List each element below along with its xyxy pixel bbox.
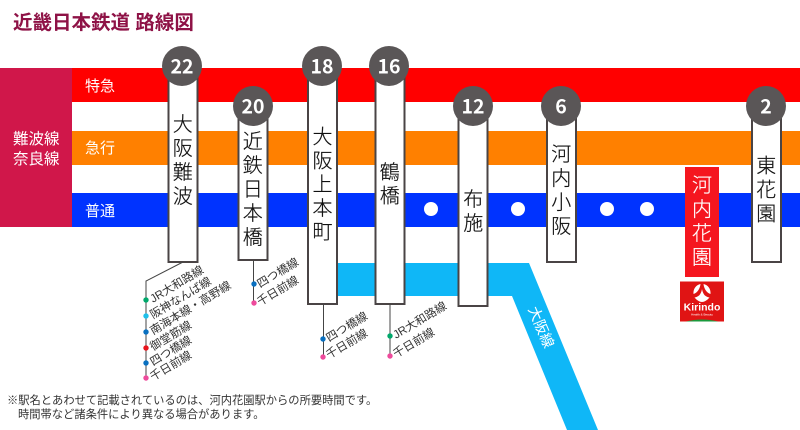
- station: Tsuruhashi: [369, 46, 409, 304]
- transfers: Kintetsu Nihombashi: 千日前線: [254, 273, 301, 309]
- station: Fuse: [453, 86, 493, 306]
- station: Osaka Uehommachi: 町: [312, 216, 332, 244]
- station: Tsuruhashi: 16: [377, 50, 401, 80]
- station: Fuse: 布: [463, 183, 483, 212]
- station: Kintetsu Nihombashi: 近: [243, 125, 263, 154]
- station: Tsuruhashi: 橋: [380, 180, 400, 208]
- station: Higashi Hanazono: 園: [756, 198, 776, 226]
- station: Kawachi Hanazono: 内: [692, 193, 712, 222]
- station: Kawachi Hanazono: 花: [692, 217, 712, 246]
- station: Osaka Uehommachi: 上: [312, 168, 332, 197]
- station: Osaka Namba: 阪: [173, 132, 193, 161]
- footnote: [7, 393, 377, 421]
- band: local: 普通: [85, 203, 115, 220]
- transfers: Tsuruhashi: JR大和路線: [390, 298, 449, 342]
- logo: Kirindo: Health & Beauty: [691, 312, 713, 316]
- station: Osaka Uehommachi: 大: [312, 120, 332, 150]
- station: Kawachi Kosaka: 河: [551, 138, 571, 167]
- station: Kintetsu Nihombashi: 20: [241, 90, 265, 120]
- station: Higashi Hanazono: 花: [756, 174, 776, 202]
- station: Higashi Hanazono: 東: [756, 150, 776, 178]
- station: Osaka Uehommachi: 本: [312, 192, 332, 221]
- osaka line: 大阪線: [524, 304, 557, 351]
- station: Kintetsu Nihombashi: [233, 86, 273, 260]
- panel: line name: 奈良線: [13, 150, 60, 168]
- station: Kintetsu Nihombashi: 本: [243, 197, 263, 226]
- transfers: Osaka Namba: 千日前線: [147, 348, 194, 384]
- station: Higashi Hanazono: [746, 86, 786, 262]
- station: Osaka Uehommachi: 阪: [312, 144, 332, 174]
- station: Tsuruhashi: 鶴: [380, 156, 400, 185]
- station: Kawachi Hanazono: 河: [692, 169, 712, 198]
- transfers: Osaka Uehommachi: [320, 304, 370, 362]
- station: Osaka Uehommachi: 18: [310, 50, 334, 80]
- logo: Kirindo: Kirindo: [684, 302, 720, 314]
- transfers: Osaka Namba: 南海本線・高野線: [147, 278, 234, 338]
- panel: line name: 難波線: [13, 130, 60, 148]
- footnote: 時間帯など諸条件により異なる場合があります。: [18, 407, 264, 421]
- station: Osaka Uehommachi: [302, 46, 342, 304]
- logo: Kirindo: [680, 282, 724, 322]
- station: Kawachi Kosaka: 内: [551, 162, 571, 191]
- transfers: Tsuruhashi: [387, 298, 449, 361]
- osaka line: [330, 263, 598, 430]
- footnote: ※駅名とあわせて記載されているのは、河内花園駅からの所要時間です。: [7, 393, 377, 407]
- band: limited express: [72, 68, 800, 102]
- transfers: Osaka Namba: 阪神なんば線: [147, 274, 214, 322]
- station: Kawachi Hanazono: [685, 167, 719, 277]
- transfers: Osaka Namba: 四つ橋線: [147, 333, 194, 369]
- station: Kintetsu Nihombashi: 日: [243, 173, 263, 202]
- band: limited express: 特急: [85, 78, 115, 95]
- transfers: Osaka Uehommachi: 四つ橋線: [323, 309, 370, 345]
- station: Kintetsu Nihombashi: 橋: [243, 221, 263, 250]
- transfers: Osaka Namba: 御堂筋線: [147, 318, 194, 354]
- station: Fuse: 施: [463, 207, 483, 236]
- stops without labels: [424, 202, 654, 216]
- transfers: Tsuruhashi: 千日前線: [390, 325, 437, 361]
- transfers: Kintetsu Nihombashi: [251, 255, 301, 309]
- station: Osaka Namba: [162, 46, 202, 262]
- station: Osaka Namba: 大: [173, 108, 193, 137]
- station: Higashi Hanazono: 2: [760, 90, 772, 120]
- station: Kintetsu Nihombashi: 鉄: [243, 149, 263, 178]
- title: 近畿日本鉄道 路線図: [13, 12, 194, 34]
- station: Kawachi Kosaka: 小: [551, 186, 571, 215]
- station: Osaka Namba: 難: [173, 156, 193, 185]
- station: Fuse: 12: [461, 90, 485, 120]
- band: express: 急行: [85, 140, 115, 157]
- station: Kawachi Kosaka: 阪: [551, 210, 571, 239]
- band: local: [72, 193, 800, 227]
- transfers: Osaka Uehommachi: 千日前線: [323, 326, 370, 362]
- band: express: [72, 131, 800, 165]
- transfers: Kintetsu Nihombashi: 四つ橋線: [254, 255, 301, 291]
- station: Osaka Namba: 22: [170, 50, 194, 80]
- station: Kawachi Kosaka: [541, 86, 581, 262]
- transfers: Osaka Namba: [143, 262, 234, 384]
- station: Kawachi Hanazono: 園: [692, 241, 712, 270]
- station: Kawachi Kosaka: 6: [555, 90, 567, 120]
- station: Osaka Namba: 波: [173, 180, 193, 209]
- transfers: Osaka Namba: JR大和路線: [147, 262, 206, 306]
- panel: line name: [0, 68, 72, 227]
